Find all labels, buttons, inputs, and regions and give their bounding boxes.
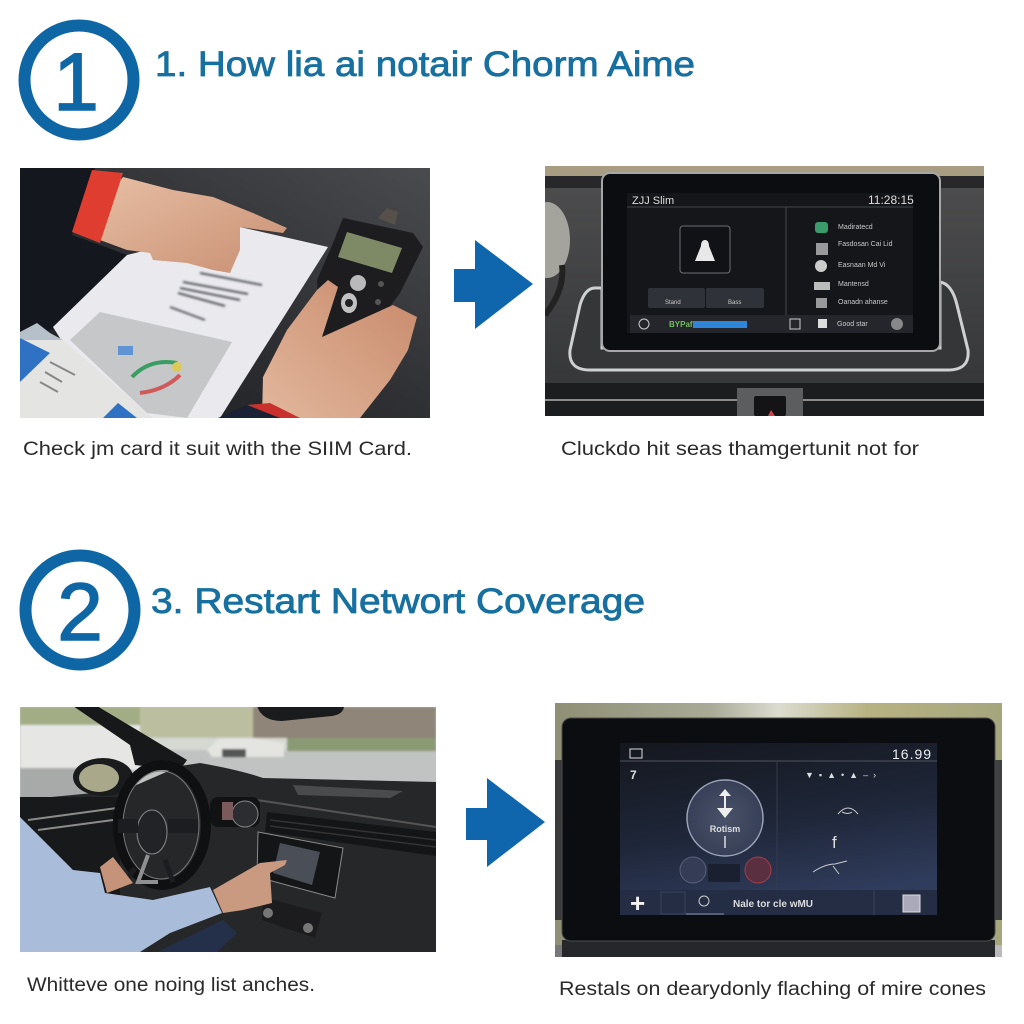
caption 1 left: Check jm card it suit with the SIIM Card. — [23, 438, 412, 460]
instrument cluster — [210, 797, 260, 827]
photo: hands holding device over paper — [20, 168, 430, 418]
side mirror — [73, 758, 133, 796]
photo: driver in car cabin — [20, 706, 436, 952]
hand bottom — [262, 280, 417, 418]
photo: large infotainment screen: f — [832, 833, 837, 852]
caption 2 right: Restals on dearydonly flaching of mire cones — [559, 979, 986, 1000]
document card — [20, 338, 153, 418]
photo: car infotainment screen: Stand — [665, 300, 681, 306]
photo: large infotainment screen — [555, 703, 1002, 957]
photo: large infotainment screen: ▼▪▲•▲–› — [805, 770, 881, 780]
step 2 number badge: 2 — [57, 567, 103, 658]
paper — [53, 227, 328, 418]
sleeve — [20, 168, 127, 345]
caption 2 left: Whitteve one noing list anches. — [27, 975, 315, 996]
photo: car infotainment screen: Oanadn ahanse — [838, 299, 888, 306]
photo: car infotainment screen: Fasdosan Cai Lid — [838, 241, 893, 248]
photo: car infotainment screen: 11:28:15 — [868, 193, 914, 207]
photo: car infotainment screen: BYPaf — [669, 320, 693, 329]
door — [20, 797, 120, 895]
dash lower — [545, 383, 984, 416]
photo: large infotainment screen: Rotism — [710, 824, 740, 834]
heading: step 2: 3. Restart Networt Coverage — [151, 582, 645, 621]
step 2 number badge — [26, 556, 134, 664]
driver arm and shirt — [100, 857, 133, 893]
photo: car infotainment screen: Good star — [837, 321, 868, 328]
screen bezel — [602, 173, 940, 351]
photo: car infotainment screen: Madiratecd — [838, 224, 873, 231]
caption 1 right: Cluckdo hit seas thamgertunit not for — [561, 438, 920, 460]
arrow 1 — [454, 240, 533, 329]
photo: car infotainment screen: Mantensd — [838, 281, 869, 288]
rearview mirror — [257, 706, 344, 721]
photo: large infotainment screen: + — [630, 888, 645, 918]
tray — [570, 282, 968, 370]
outside scenery — [20, 707, 436, 800]
infotainment unit — [257, 832, 343, 898]
A pillar — [73, 706, 187, 770]
step 1 number badge — [24, 26, 134, 134]
photo: large infotainment screen: 16.99 — [892, 746, 932, 762]
dash top — [20, 763, 436, 952]
device — [317, 208, 423, 342]
heading: step 1: 1. How lia ai notair Chorm Aime — [155, 45, 695, 84]
photo: car infotainment screen — [524, 166, 984, 416]
photo: car infotainment screen: Easnaan Md Vi — [838, 262, 886, 269]
photo: car infotainment screen: ZJJ Slim — [632, 195, 674, 207]
photo: car infotainment screen: Bass — [728, 300, 741, 306]
step 1 number badge: 1 — [53, 37, 99, 128]
photo: large infotainment screen: Nale tor cle wMU — [733, 899, 813, 910]
hand top — [90, 177, 287, 273]
photo: large infotainment screen: 7 — [630, 768, 637, 782]
vents — [265, 812, 436, 856]
arrow 2 — [466, 778, 545, 867]
steering wheel — [118, 765, 206, 885]
